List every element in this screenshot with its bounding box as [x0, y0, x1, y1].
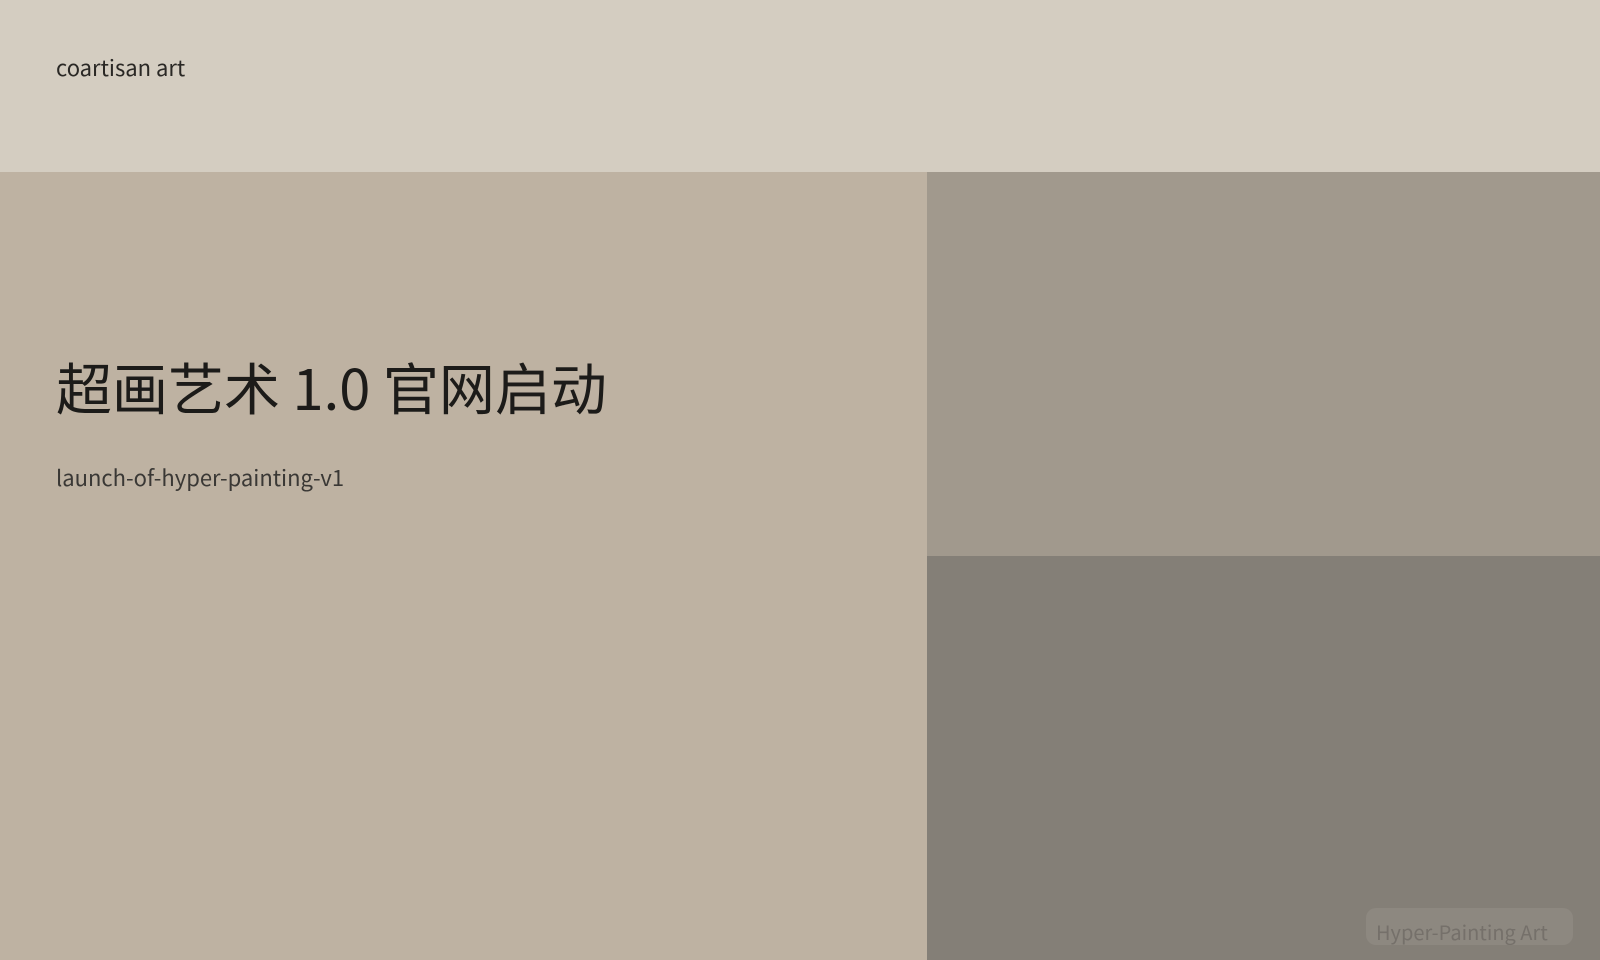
panel: right upper block	[927, 172, 1600, 556]
panel: top header band	[0, 0, 1600, 172]
watermark badge	[1366, 908, 1573, 945]
watermark text: Hyper-Painting Art	[1376, 917, 1548, 946]
title: 超画艺术 1.0 官网启动	[56, 346, 607, 427]
panel: right lower block	[927, 556, 1600, 960]
subtitle: launch-of-hyper-painting-v1	[56, 461, 344, 493]
panel: left main	[0, 172, 927, 960]
logo text: coartisan art	[56, 51, 185, 83]
